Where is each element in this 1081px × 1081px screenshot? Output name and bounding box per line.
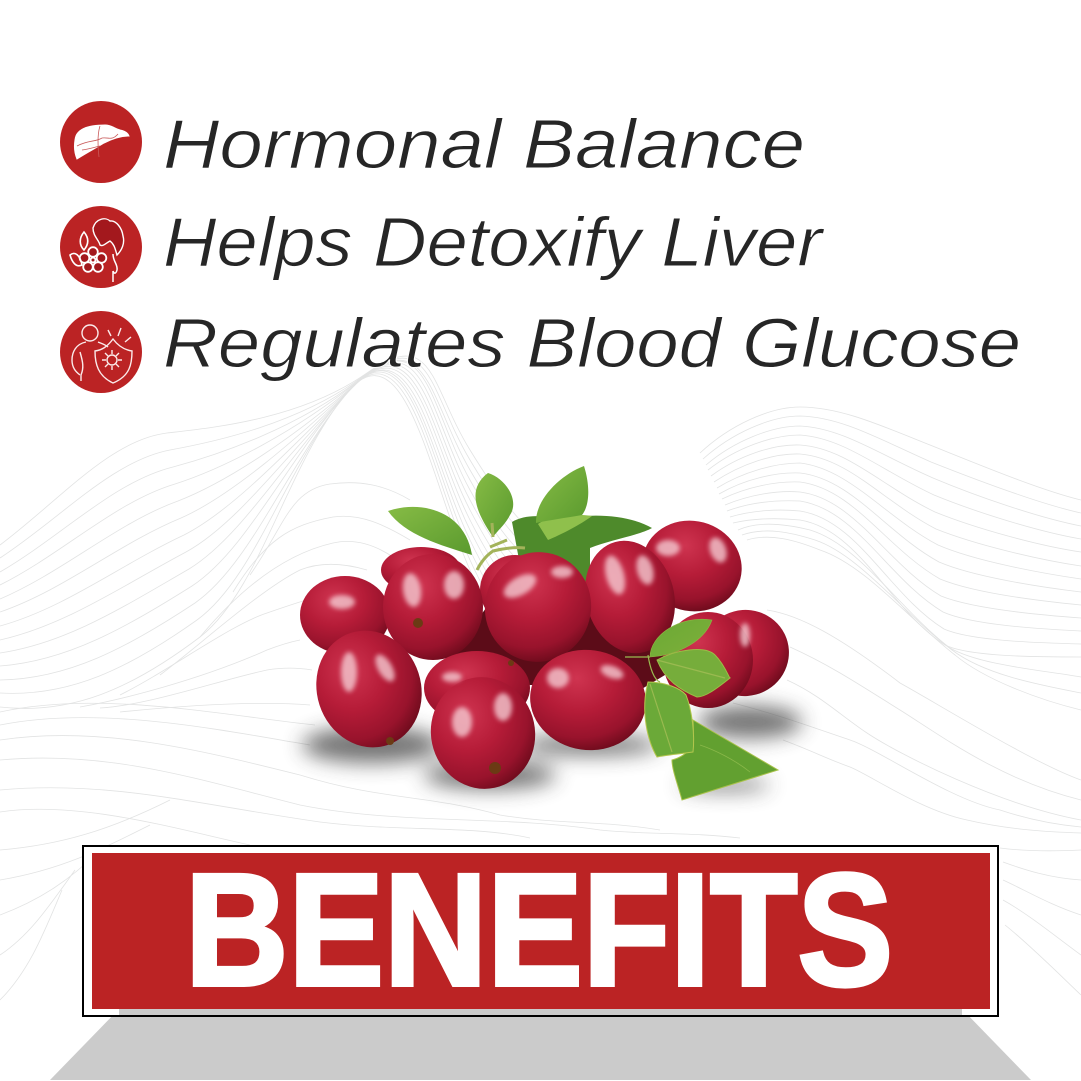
ground shadow — [302, 706, 802, 791]
list item text: Regulates Blood Glucose — [163, 304, 1021, 382]
berry calyx dots — [386, 618, 514, 774]
grey pedestal — [50, 1009, 1031, 1080]
banner title: BENEFITS — [185, 840, 893, 1019]
stems — [477, 523, 525, 570]
icon: flower and body — [60, 206, 142, 288]
benefits banner — [83, 840, 998, 1019]
back leaves — [512, 516, 652, 585]
list item text: Helps Detoxify Liver — [163, 203, 825, 281]
front leaves — [625, 619, 778, 800]
berries — [300, 510, 799, 799]
cluster dark backdrop — [450, 590, 690, 690]
upper leaves — [388, 466, 588, 555]
berry highlights — [329, 535, 750, 737]
icon: person and shield — [60, 311, 142, 393]
icon: liver — [60, 101, 142, 183]
cornelian cherries illustration — [300, 466, 802, 800]
benefits list — [60, 101, 1021, 393]
list item text: Hormonal Balance — [163, 105, 805, 183]
